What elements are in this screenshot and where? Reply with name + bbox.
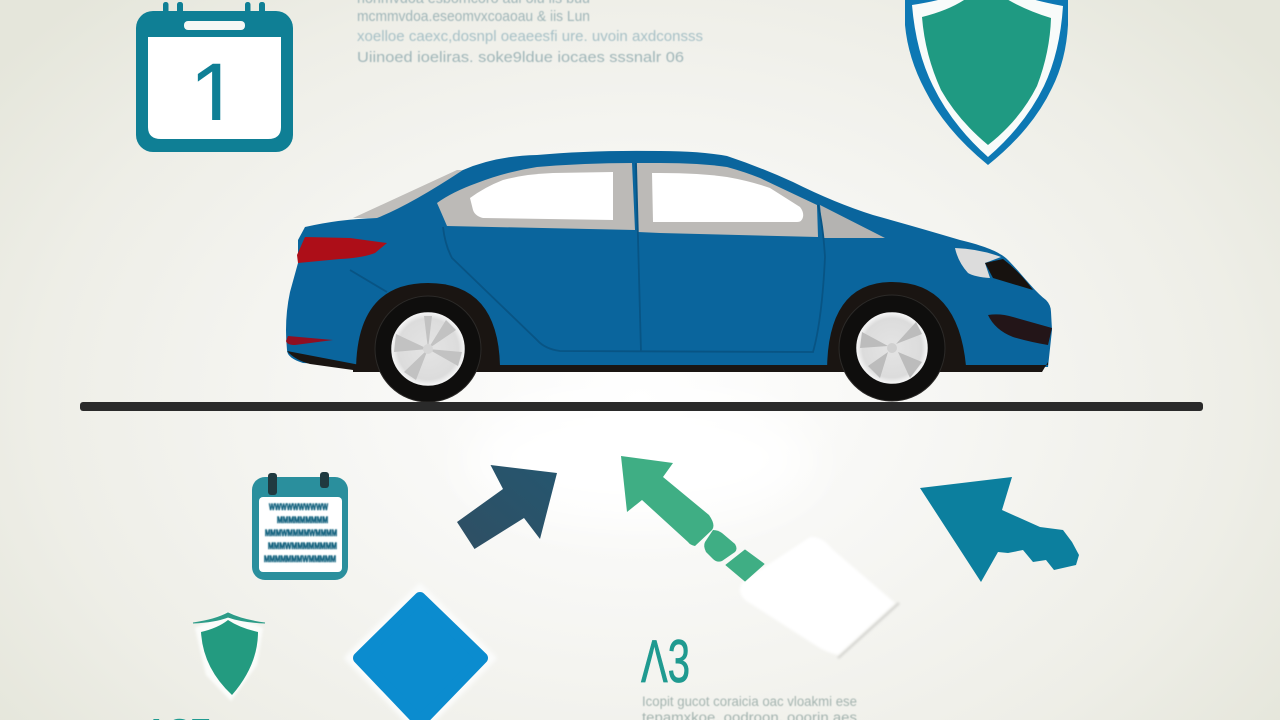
arrow: dark slate: [457, 465, 557, 549]
rear window glass: [470, 172, 613, 220]
icon: large calendar: [136, 2, 293, 152]
calendar text: [264, 502, 337, 564]
icon: blue diamond: [347, 586, 494, 720]
calendar text: MMMWMMMMWMMMM: [265, 528, 337, 538]
text block: top description: mcmmvdoa.eseomvxcoaoau & iis Lun: [357, 8, 590, 25]
quarter window: [820, 205, 885, 238]
icon: large shield: [905, 0, 1068, 165]
windscreen strip: [353, 170, 470, 218]
front window glass: [652, 173, 803, 222]
calendar text: WWWWWWWWWW: [269, 502, 328, 512]
black sill: [287, 351, 1048, 372]
rear wheel arch: [356, 283, 500, 372]
text block: top description: [357, 0, 703, 66]
door seams: [350, 163, 825, 352]
calendar text: MMMWMMMMMMMM: [268, 541, 337, 551]
arrow: green segmented: [621, 456, 764, 581]
front wheel arch: [827, 282, 966, 372]
front wheel: [839, 295, 945, 401]
text block: lower description: Icopit gucot coraicia oac vloakmi ese: [642, 694, 857, 709]
car body: [286, 151, 1052, 367]
text block: lower description: [642, 694, 857, 720]
icon: small calendar: [252, 472, 348, 580]
label: A3: Λ3: [641, 628, 690, 695]
rear window surround: [437, 163, 635, 230]
blank white card: [740, 537, 899, 658]
headlight black trim: [985, 259, 1033, 290]
ground line: [80, 402, 1203, 411]
front window surround: [636, 163, 818, 237]
icon: small shield: [193, 612, 265, 701]
front grille: [988, 314, 1052, 345]
illustration: blue sedan: [286, 151, 1052, 402]
arrow: teal with rough tail: [920, 477, 1079, 582]
rear wheel: [375, 296, 481, 402]
calendar text: MMMMMMMWMMMMM: [264, 554, 336, 564]
text block: top description: xoelloe caexc,dosnpl oeaeesfi ure. uvoin axdconsss: [357, 28, 703, 45]
headlight: [955, 248, 1001, 278]
rear reflector: [286, 336, 333, 345]
calendar text: MMMMMMMMM: [277, 515, 328, 525]
tail light: [297, 237, 387, 263]
icon: large calendar: 1: [189, 45, 240, 147]
text block: top description: Uiinoed ioeliras. soke9ldue iocaes sssnalr 06: [357, 49, 684, 66]
